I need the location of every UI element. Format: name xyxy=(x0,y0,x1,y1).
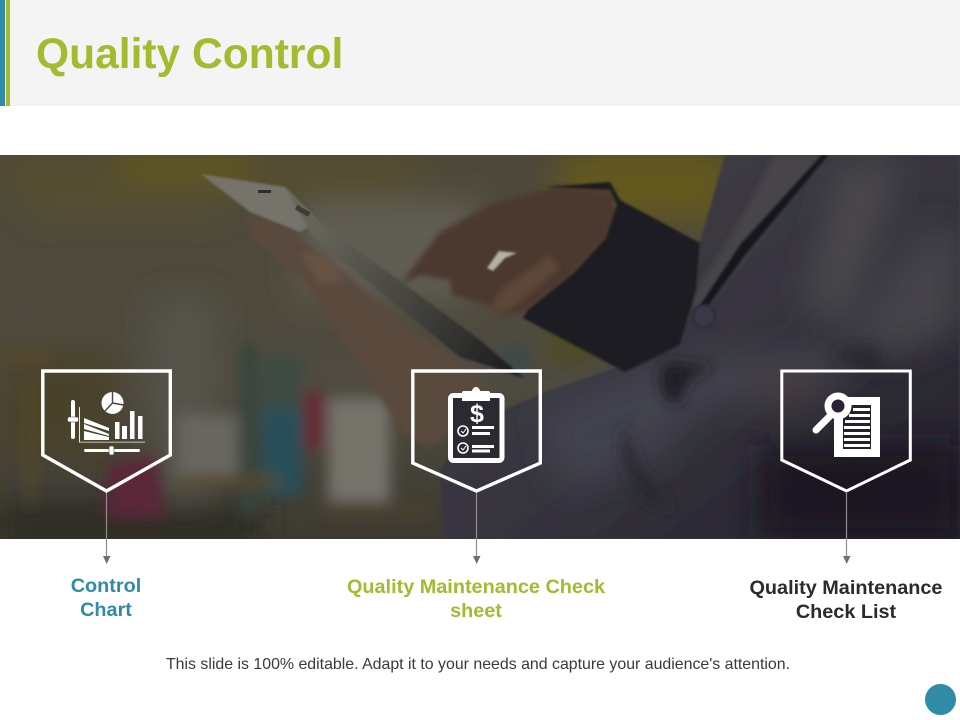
connector arrow xyxy=(103,493,110,564)
header band xyxy=(0,0,960,106)
icon: clipboard with dollar sign xyxy=(450,387,502,460)
badge: check list xyxy=(780,370,912,564)
jacket body and sleeve xyxy=(440,155,960,539)
right hand xyxy=(400,187,618,314)
connector arrow xyxy=(843,493,850,564)
left hand xyxy=(246,216,500,448)
jacket button xyxy=(693,305,715,327)
label: control chart: Chart xyxy=(80,599,132,621)
title: Quality Control xyxy=(36,30,343,78)
icon: clipboard with dollar sign: $ xyxy=(470,400,484,428)
label: check list xyxy=(750,577,942,623)
accent bar: green xyxy=(6,0,10,106)
label: control chart: Control xyxy=(71,575,141,597)
lapel xyxy=(690,155,823,315)
pentagon outline xyxy=(43,371,170,491)
label: control chart xyxy=(71,575,141,621)
label: check sheet: sheet xyxy=(450,600,502,622)
label: check sheet xyxy=(347,576,605,622)
pentagon outline xyxy=(413,371,540,491)
cuff xyxy=(523,182,700,372)
badge: check sheet xyxy=(411,369,542,564)
label: check list: Quality Maintenance xyxy=(750,577,942,599)
icon: magnifier over document xyxy=(816,396,880,457)
warehouse blur xyxy=(0,150,730,545)
tablet xyxy=(201,174,318,232)
label: check list: Check List xyxy=(796,601,896,623)
pentagon outline xyxy=(782,371,910,491)
label: check sheet: Quality Maintenance Check xyxy=(347,576,605,598)
badge: control chart xyxy=(41,369,172,564)
photo panel: businessman using tablet in a warehouse xyxy=(0,155,960,539)
caption: This slide is 100% editable. Adapt it to your needs and capture your audience's attention. xyxy=(166,656,790,673)
page marker circle xyxy=(925,684,956,715)
accent bar: teal xyxy=(0,0,5,106)
icon: chart with sliders xyxy=(68,392,145,455)
connector arrow xyxy=(473,493,480,564)
